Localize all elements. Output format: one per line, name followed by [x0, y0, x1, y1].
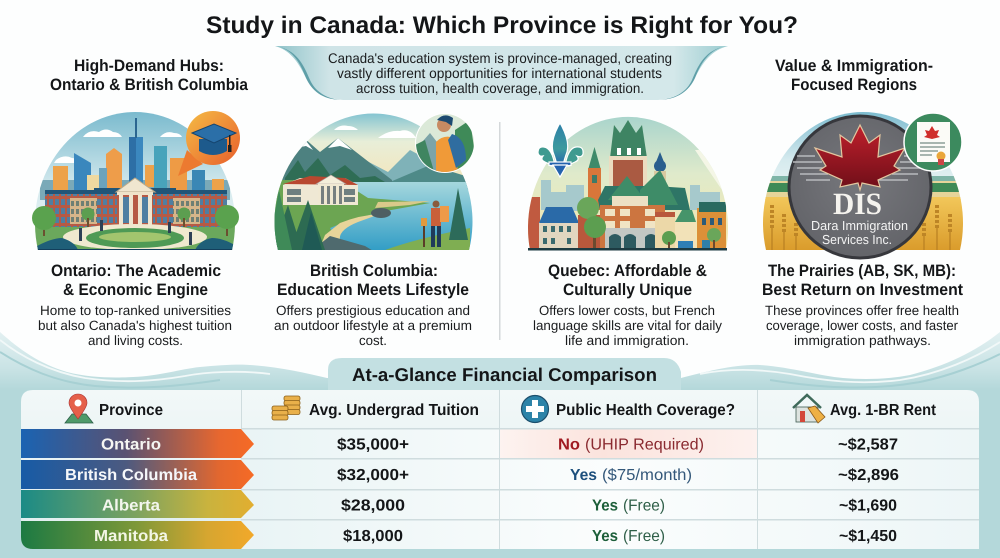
heading: high-demand hubs: High-Demand Hubs: — [74, 57, 224, 75]
text: British Columbia card: Education Meets Lifestyle — [277, 281, 469, 299]
text: Ontario card: but also Canada's highest tuition — [38, 318, 232, 333]
text: British Columbia card: an outdoor lifestyle at a premium — [274, 318, 472, 333]
text: Quebec card: Quebec: Affordable & — [548, 262, 707, 280]
row: Ontario: $35,000+ — [337, 436, 409, 454]
text: Ontario card: Home to top-ranked universities — [40, 303, 231, 318]
wave background — [0, 332, 1000, 558]
text: Ontario card — [38, 262, 232, 348]
row: Manitoba: Manitoba — [94, 528, 168, 545]
illustration: Quebec old town — [525, 110, 730, 252]
text: Prairies card: Best Return on Investment — [762, 281, 963, 299]
row: Alberta: $28,000 — [341, 498, 405, 514]
row: Alberta: ~$1,690 — [839, 498, 897, 514]
icon: fleur-de-lis — [538, 123, 583, 177]
header row: Avg. Undergrad Tuition — [309, 402, 479, 419]
title: Study in Canada: Which Province is Right for You? — [206, 12, 798, 39]
row: British Columbia: $32,000+ — [337, 467, 409, 484]
icon: health cross — [522, 396, 548, 422]
header row: Avg. 1-BR Rent — [830, 402, 937, 419]
row: Manitoba: Yes — [592, 528, 618, 545]
row: Ontario — [21, 429, 898, 458]
illustration: British Columbia lake and mountains — [268, 110, 478, 252]
text: British Columbia card — [274, 262, 472, 348]
row: Ontario: No — [558, 436, 580, 454]
text: Ontario card: & Economic Engine — [63, 281, 208, 299]
header row — [65, 394, 937, 423]
heading: value regions — [775, 57, 933, 94]
section tab: financial comparison heading — [328, 358, 681, 392]
row: British Columbia: British Columbia — [65, 467, 197, 484]
heading: high-demand hubs — [50, 57, 249, 94]
illustration: Ontario campus and skyline — [30, 110, 242, 252]
text: Ontario card: Ontario: The Academic — [51, 262, 221, 280]
heading: value regions: Focused Regions — [791, 76, 917, 94]
row: British Columbia: Yes — [570, 467, 597, 484]
intro banner: Canada's education system is province-managed, creating — [328, 50, 672, 66]
intro banner — [275, 46, 728, 100]
illustration: Prairies with DIS badge: DIS — [833, 186, 882, 221]
text: Quebec card — [533, 262, 722, 348]
header row: Public Health Coverage? — [556, 402, 735, 419]
text: Prairies card: coverage, lower costs, and faster — [766, 318, 958, 333]
illustration: Prairies with DIS badge — [760, 110, 965, 260]
row: Ontario: (UHIP Required) — [585, 436, 704, 454]
row: British Columbia — [21, 460, 899, 489]
text: British Columbia card: cost. — [359, 333, 387, 348]
text: British Columbia card: Offers prestigious education and — [276, 303, 470, 318]
illustration: Prairies with DIS badge: Services Inc. — [822, 232, 892, 247]
row: Ontario: ~$2,587 — [838, 436, 898, 454]
icon: maple leaf — [815, 125, 905, 190]
comparison table — [21, 390, 979, 549]
text: Prairies card: These provinces offer free health — [765, 303, 959, 318]
row: Alberta: Yes — [592, 498, 618, 514]
vertical divider — [499, 122, 500, 340]
text: Quebec card: language skills are vital for daily — [533, 318, 722, 333]
row: British Columbia: ($75/month) — [602, 467, 692, 484]
table background — [21, 390, 979, 549]
icon: map pin — [65, 394, 93, 423]
text: Prairies card: immigration pathways. — [794, 333, 931, 348]
row: Ontario: Ontario — [101, 436, 161, 454]
illustration: Prairies with DIS badge: Dara Immigration — [811, 218, 908, 233]
heading: value regions: Value & Immigration- — [775, 57, 933, 75]
row: Manitoba: $18,000 — [343, 528, 403, 545]
header row: Province — [99, 402, 163, 419]
heading: high-demand hubs: Ontario & British Columbia — [50, 76, 249, 94]
text: British Columbia card: British Columbia: — [310, 262, 438, 280]
text: Ontario card: and living costs. — [88, 333, 183, 348]
icon: house with price tag — [793, 395, 825, 423]
row: Alberta — [21, 490, 897, 518]
section tab: financial comparison heading: At-a-Glance Financial Comparison — [352, 364, 657, 385]
row: Alberta: Alberta — [102, 498, 160, 514]
intro banner: vastly different opportunities for international students — [337, 65, 662, 81]
row: Alberta: (Free) — [623, 498, 665, 514]
text: Prairies card — [762, 262, 963, 348]
row: British Columbia: ~$2,896 — [838, 467, 899, 484]
intro banner: across tuition, health coverage, and immigration. — [356, 80, 644, 96]
text: Prairies card: The Prairies (AB, SK, MB): — [768, 262, 956, 280]
text: Quebec card: Offers lower costs, but French — [539, 303, 715, 318]
text: Quebec card: life and immigration. — [565, 333, 689, 348]
row: Manitoba — [21, 521, 897, 549]
text: Quebec card: Culturally Unique — [563, 281, 692, 299]
row: Manitoba: (Free) — [623, 528, 665, 545]
row: Manitoba: ~$1,450 — [839, 528, 897, 545]
icon: coins — [272, 396, 300, 420]
